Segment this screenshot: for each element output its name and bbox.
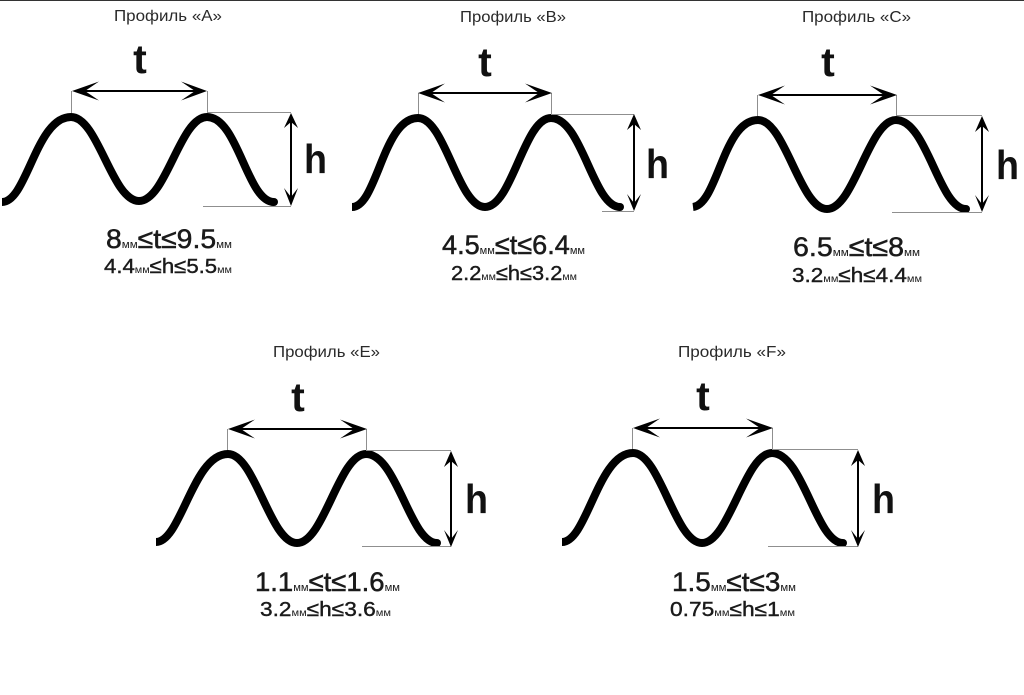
- corrugated wave: [562, 453, 847, 547]
- label: height h: h: [872, 476, 895, 522]
- panel: profile F: [562, 344, 895, 621]
- label: pitch t: t: [291, 374, 305, 420]
- label: pitch t: t: [478, 39, 492, 85]
- height dimension arrow: [362, 450, 458, 547]
- label: pitch t: t: [133, 36, 147, 82]
- corrugated wave: [693, 120, 970, 213]
- corrugated wave: [352, 118, 624, 211]
- label: pitch t: t: [696, 373, 710, 419]
- corrugated wave: [156, 454, 441, 547]
- height range: 3.2 мм≤h≤4.4 мм: [792, 264, 922, 287]
- height dimension arrow: [892, 116, 989, 212]
- heading: profile C: Профиль «C»: [802, 9, 911, 26]
- pitch range: 6.5мм≤t≤8 мм: [793, 232, 920, 262]
- pitch dimension arrow: [758, 86, 897, 116]
- height range: 4.4мм≤h≤5.5 мм: [104, 255, 232, 278]
- panel: profile C: [693, 9, 1019, 287]
- heading: profile B: Профиль «B»: [460, 9, 566, 26]
- height range: 2.2мм≤h≤3.2 мм: [451, 262, 577, 285]
- pitch dimension arrow: [72, 82, 208, 113]
- pitch range: 4.5мм≤t≤6.4мм: [442, 230, 585, 260]
- heading: profile A: Профиль «A»: [114, 8, 222, 25]
- height dimension arrow: [768, 450, 865, 547]
- height range: 0.75 мм≤h≤1 мм: [670, 598, 795, 621]
- label: pitch t: t: [821, 39, 835, 85]
- corrugated wave: [2, 117, 278, 206]
- pitch dimension arrow: [228, 420, 367, 451]
- height dimension arrow: [203, 112, 298, 206]
- label: height h: h: [304, 136, 327, 182]
- height dimension arrow: [551, 114, 641, 212]
- pitch dimension arrow: [418, 84, 552, 115]
- panel: profile E: [156, 344, 488, 621]
- label: height h: h: [465, 476, 488, 522]
- panel: profile B: [352, 9, 669, 285]
- heading: profile E: Профиль «E»: [273, 344, 380, 361]
- label: height h: h: [646, 141, 669, 187]
- height range: 3.2 мм≤h≤3.6 мм: [260, 598, 391, 621]
- panel: profile A: [2, 8, 327, 278]
- label: height h: h: [996, 142, 1019, 188]
- heading: profile F: Профиль «F»: [678, 344, 786, 361]
- pitch dimension arrow: [632, 418, 773, 450]
- pitch range: 1.1мм≤t≤1.6мм: [255, 567, 400, 597]
- pitch range: 8мм≤t≤9.5 мм: [106, 224, 232, 254]
- pitch range: 1.5мм≤t≤3мм: [672, 567, 796, 597]
